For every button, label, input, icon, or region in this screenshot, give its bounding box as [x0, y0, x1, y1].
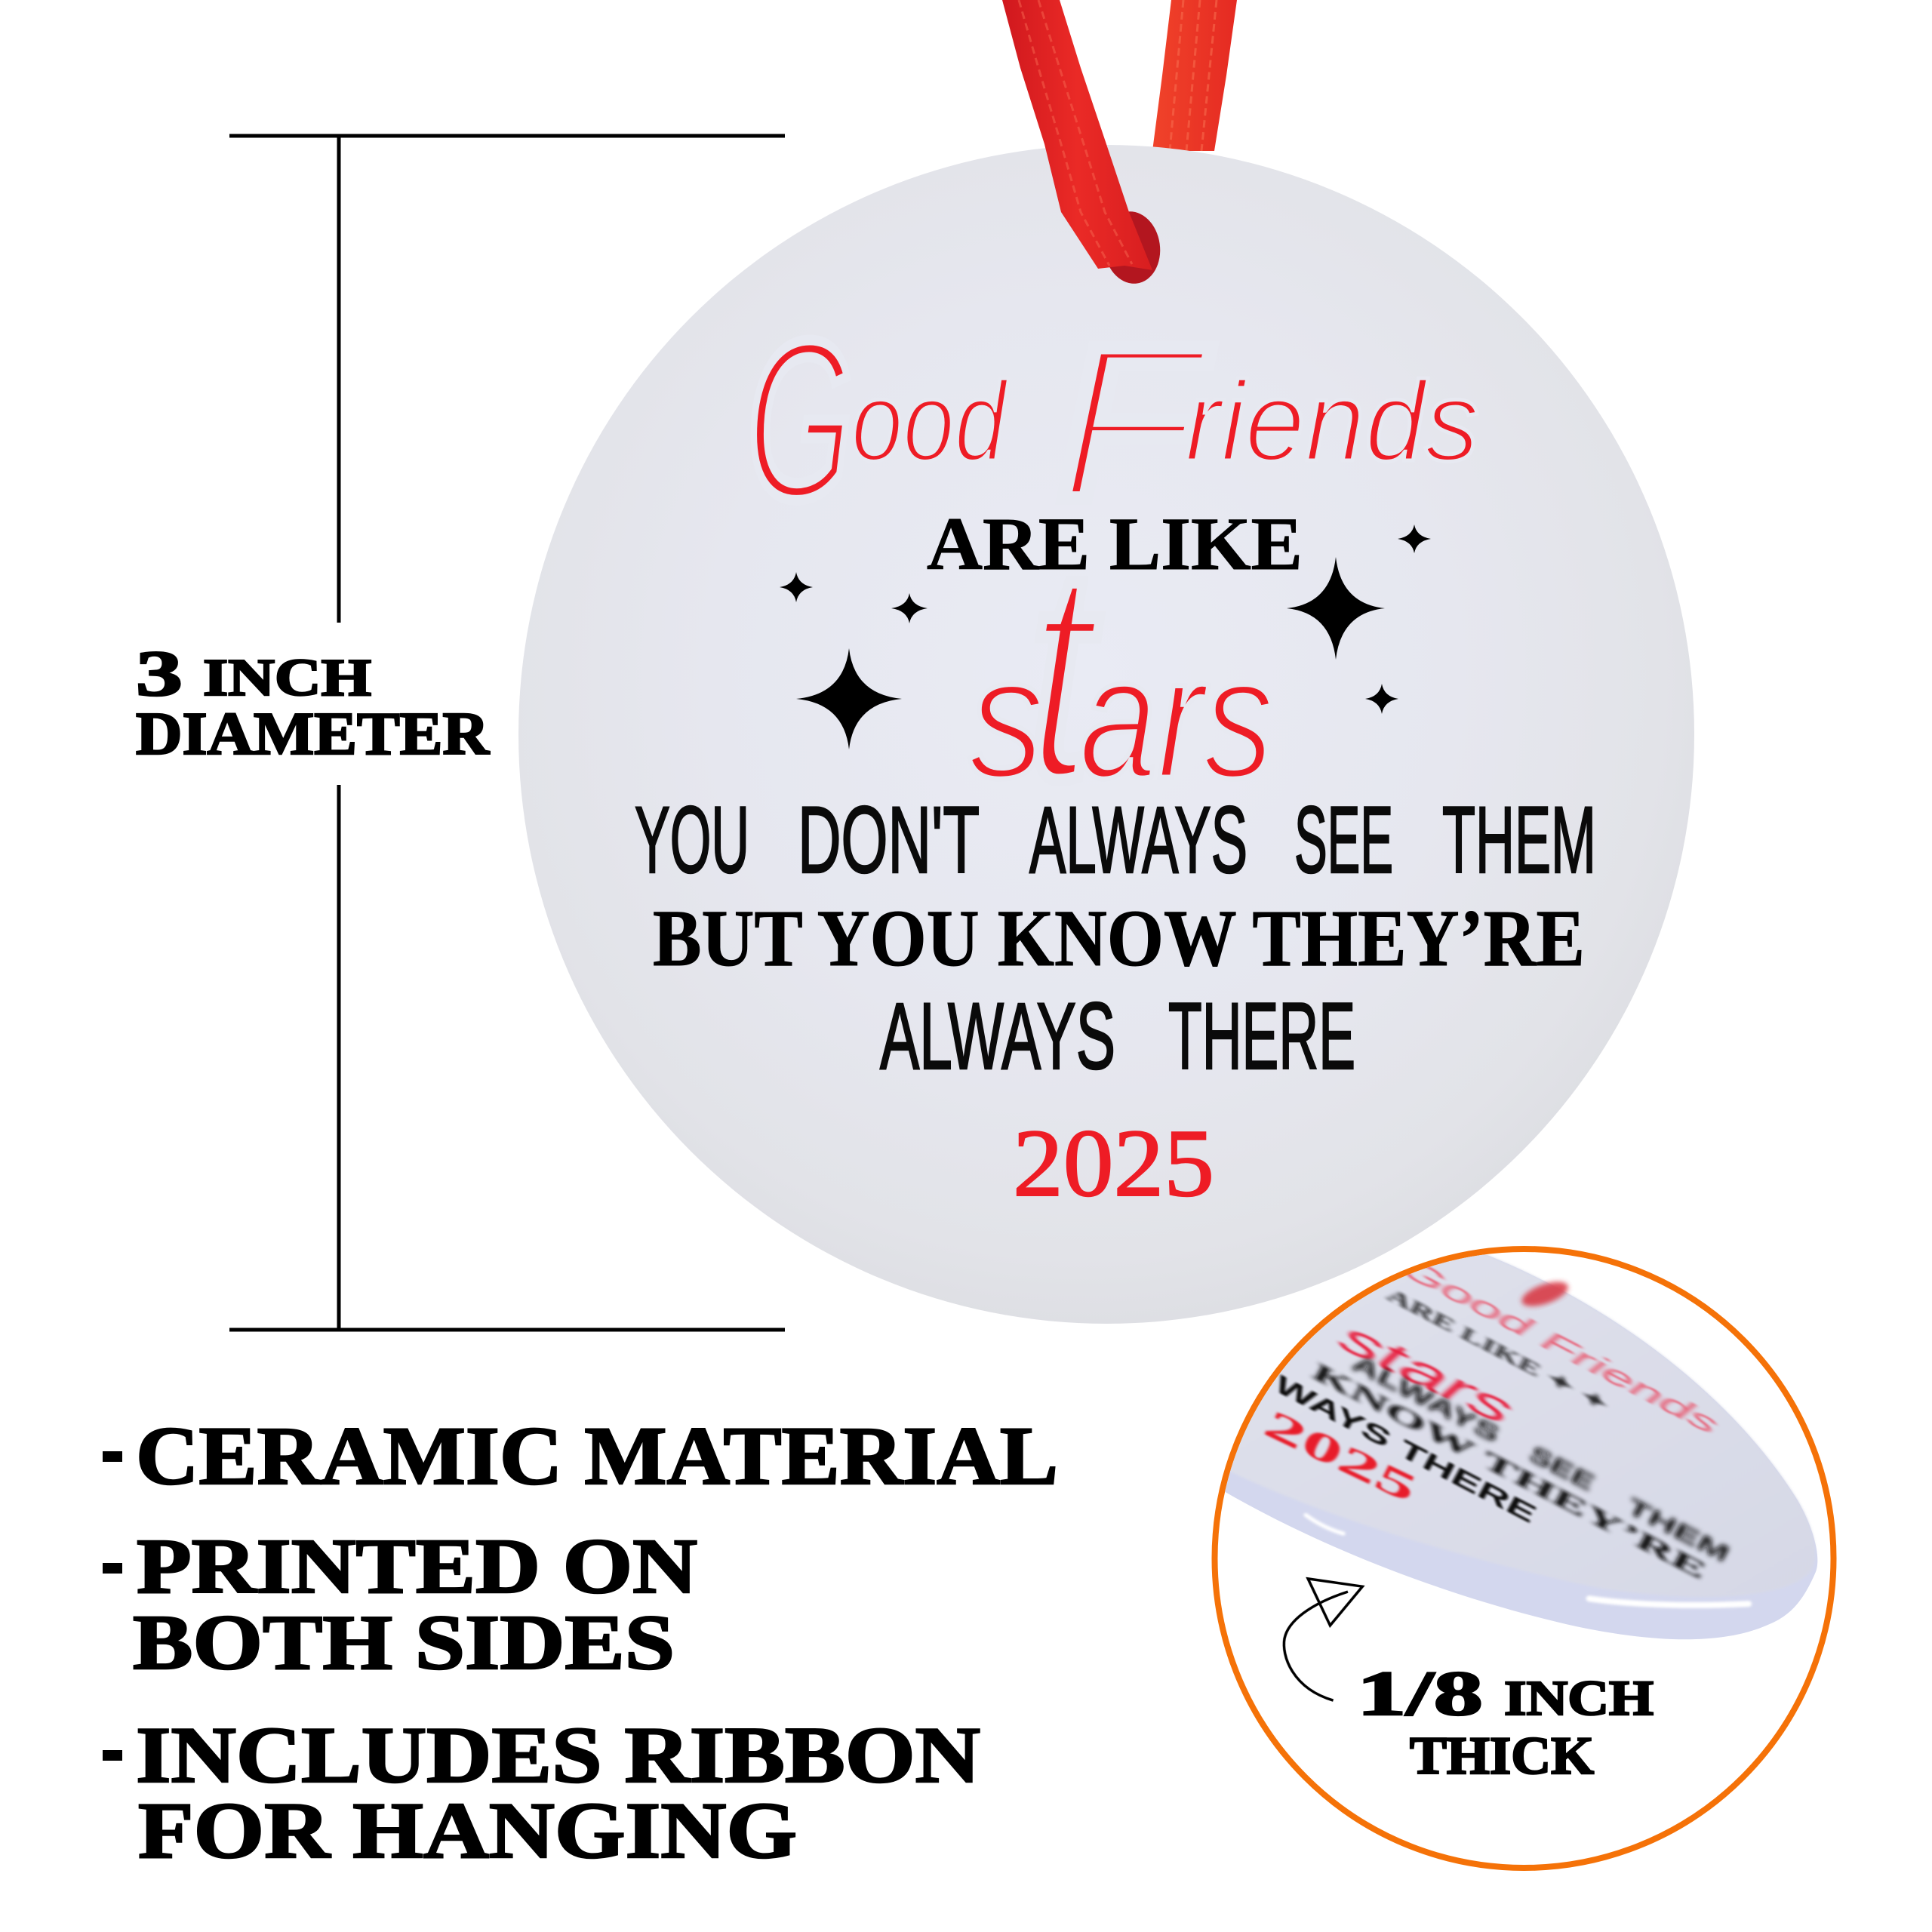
ribbon hole [1100, 208, 1164, 288]
bullet: includes ribbon for hanging: INCLUDES RIBBON [136, 1711, 980, 1799]
ceramic top surface [1230, 1254, 1815, 1541]
blurred print: ribbon hole [1518, 1277, 1571, 1311]
red year print: 2025 [1257, 1402, 1424, 1511]
text: you don't always see them: DON'T [798, 788, 980, 893]
bullet: printed on both sides: BOTH SIDES [133, 1599, 675, 1686]
label: 1/8 inch thick: 1/8 [1357, 1659, 1483, 1729]
icon: small star 4 [1365, 684, 1398, 714]
headline: Good Friends: F [1057, 300, 1214, 545]
close-up ornament edge photo [1204, 1240, 1817, 1639]
arrow pointing to edge [1284, 1579, 1362, 1700]
icon: small star 1 [780, 572, 813, 602]
ribbon back strand [1152, 0, 1237, 151]
feature list [103, 1410, 1058, 1875]
text: you don't always see them: SEE [1294, 788, 1393, 893]
headline: Good Friends: G [747, 293, 853, 546]
label: 3 inch diameter: 3 [136, 637, 183, 709]
text: you don't always see them [635, 788, 1596, 893]
text: you don't always see them: YOU [635, 788, 749, 893]
blurred print: always see them: ALWAYS [1348, 1350, 1504, 1447]
icon: large star right [1287, 557, 1385, 660]
blurred print: always see them [1348, 1350, 1734, 1567]
headline: stars: ars [1079, 620, 1274, 814]
blurred print: know they're: KNOW THEY’RE [1308, 1358, 1711, 1585]
orange circle background [1215, 1249, 1834, 1868]
label: 3 inch diameter [136, 637, 490, 768]
rim highlights [1306, 1515, 1749, 1605]
bullet: printed on both sides [103, 1523, 697, 1686]
year: 2025: 2025 [1013, 1109, 1214, 1217]
bullet: includes ribbon for hanging: FOR HANGING [138, 1786, 797, 1875]
text: always there: ALWAYS [880, 984, 1115, 1089]
label: 3 inch diameter: DIAMETER [136, 701, 490, 768]
blurred print: good friends: Good Friends [1396, 1251, 1723, 1441]
icon: small star 2 [891, 593, 928, 623]
text: you don't always see them: THEM [1442, 788, 1596, 893]
icon: large star left [796, 648, 902, 749]
ribbon front strand [1002, 0, 1152, 270]
blurred print: always there: WAYS THERE [1270, 1371, 1541, 1528]
blurred print: are like: ARE LIKE ✦ ✦ [1383, 1284, 1612, 1416]
ceramic rim [1204, 1240, 1817, 1639]
label: 1/8 inch thick: THICK [1410, 1727, 1594, 1786]
text: you don't always see them: ALWAYS [1029, 788, 1247, 893]
label: 3 inch diameter: INCH [203, 649, 371, 707]
blurred print: always see them: SEE [1524, 1441, 1599, 1496]
headline: Good Friends: riends [1185, 358, 1479, 485]
ceramic ornament disc [518, 0, 1694, 1324]
diameter dimension lines [229, 136, 785, 1330]
blurred print: always see them: THEM [1623, 1493, 1734, 1567]
label: 1/8 inch thick: INCH [1504, 1671, 1654, 1726]
icon: small star 3 [1398, 525, 1431, 553]
headline: stars: t [1028, 504, 1100, 841]
text: are like: ARE LIKE [927, 502, 1303, 586]
headline: stars: s [969, 620, 1044, 814]
bullet: ceramic material: CERAMIC MATERIAL [136, 1410, 1058, 1502]
bullet: printed on both sides: PRINTED ON [137, 1523, 697, 1610]
text: but you know they're: BUT YOU KNOW THEY’RE [653, 894, 1585, 983]
headline: Good Friends: ood [851, 358, 1009, 485]
label: 1/8 inch thick [1357, 1659, 1654, 1786]
panel: thickness close-up [1204, 1240, 1834, 1868]
blurred print: stars: stars [1333, 1312, 1521, 1434]
text: always there: THERE [1168, 984, 1355, 1089]
bullet: includes ribbon for hanging [103, 1711, 980, 1875]
